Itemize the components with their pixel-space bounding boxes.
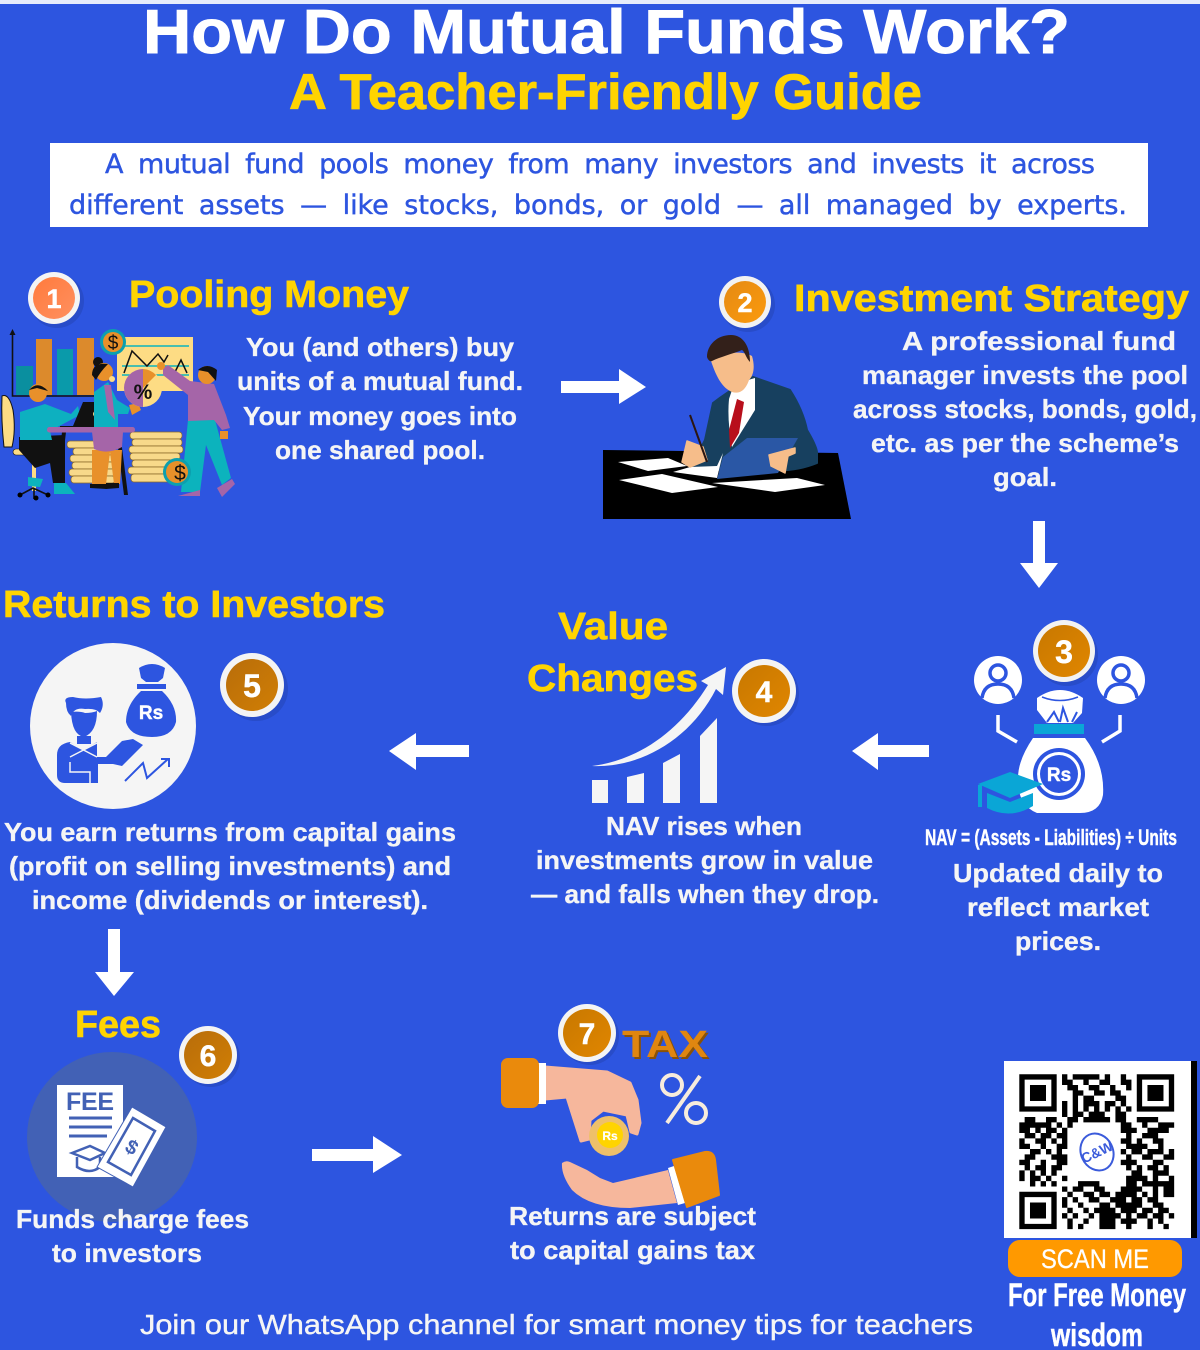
jacket — [690, 377, 817, 470]
arrow: step 3 to step 4 — [852, 733, 929, 770]
step 6 text: Funds charge fees — [16, 1204, 249, 1234]
step 1 heading: Pooling Money — [129, 274, 409, 316]
coin stacks — [67, 432, 183, 483]
step 7 badge: 7 — [579, 1018, 595, 1051]
step 6 text — [16, 1204, 249, 1268]
step 6 badge: 6 — [200, 1040, 216, 1073]
step 4 text: — and falls when they drop. — [531, 879, 879, 909]
step 4 badge — [732, 659, 799, 726]
writing hand — [682, 441, 707, 467]
investor left — [974, 656, 1022, 704]
bar chart in illustration — [10, 329, 100, 396]
step 7 text — [509, 1201, 756, 1265]
desk and laptop — [47, 402, 135, 495]
step 4 badge: 4 — [756, 676, 773, 709]
step 5 heading: Returns to Investors — [3, 584, 385, 626]
illustration: fund manager at desk — [603, 335, 851, 519]
pen — [690, 415, 707, 462]
step 3 text — [953, 858, 1163, 956]
open page — [673, 453, 723, 478]
QR logo: C&W — [1078, 1137, 1116, 1166]
arrow: step 5 to step 6 — [95, 929, 134, 996]
arrow: step 4 to step 5 — [389, 733, 469, 770]
step 5 text: You earn returns from capital gains — [4, 817, 456, 847]
coin bottom — [163, 458, 191, 486]
rupee coin: Rs — [602, 1129, 618, 1143]
step 2 badge — [719, 276, 775, 332]
money bag: Rs — [139, 703, 163, 724]
fee document: FEE — [66, 1088, 114, 1116]
bottom hand — [562, 1152, 719, 1208]
definition box: different assets — like stocks, bonds, or gold — all managed by experts. — [69, 190, 1127, 221]
step 3 badge — [1033, 620, 1098, 686]
step 1 text: one shared pool. — [275, 435, 485, 465]
definition box: A mutual fund pools money from many investors and invests it across — [105, 149, 1095, 180]
banknote: $ — [121, 1136, 142, 1160]
arrow: step 1 to step 2 — [561, 369, 646, 404]
fee icon — [27, 1052, 197, 1222]
standing woman — [90, 357, 141, 489]
line chart board — [117, 337, 193, 391]
footer call to action: Join our WhatsApp channel for smart money tips for teachers — [140, 1309, 973, 1340]
investor right — [1097, 656, 1145, 704]
step 2 heading: Investment Strategy — [794, 278, 1189, 320]
step 7 text: to capital gains tax — [510, 1235, 756, 1265]
step 7 badge — [558, 1004, 619, 1065]
investor figure — [57, 697, 143, 783]
tie — [729, 399, 744, 448]
step 2 text: across stocks, bonds, gold, — [853, 394, 1197, 424]
papers — [618, 458, 825, 493]
coin top — [100, 329, 126, 355]
step 5 badge — [220, 653, 288, 721]
illustration: investor with returns — [30, 643, 196, 809]
graduation cap — [978, 772, 1043, 814]
folder — [717, 438, 798, 479]
bag neck — [1037, 690, 1083, 723]
banknote — [97, 1107, 166, 1187]
step 5 badge: 5 — [243, 668, 261, 704]
hair — [707, 335, 750, 362]
pie chart with percent: % — [134, 381, 153, 404]
growth arrow — [125, 759, 169, 781]
step 5 text — [4, 817, 456, 915]
arrow: step 2 to step 3 — [1020, 521, 1058, 588]
QR caption — [1008, 1277, 1186, 1350]
title: How Do Mutual Funds Work? — [143, 0, 1070, 67]
definition box — [50, 143, 1148, 227]
coin top: $ — [108, 333, 119, 354]
shirt — [728, 378, 755, 447]
step 2 text: goal. — [993, 462, 1057, 492]
money bag — [126, 664, 176, 737]
step 2 text: etc. as per the scheme’s — [871, 428, 1179, 458]
QR code — [1004, 1061, 1197, 1238]
arrow: step 6 to step 7 — [312, 1136, 402, 1173]
connectors — [998, 715, 1120, 742]
bag band — [1034, 724, 1084, 734]
QR data modules — [1019, 1077, 1174, 1226]
step 4 text: NAV rises when — [606, 811, 802, 841]
step 1 badge — [28, 272, 84, 328]
seated man — [19, 384, 80, 494]
illustration: pooled money bag and investors — [974, 656, 1145, 814]
illustration: people pooling money — [2, 329, 235, 500]
step 1 text: You (and others) buy — [246, 332, 515, 362]
QR logo — [1074, 1127, 1121, 1176]
step 2 text — [853, 326, 1197, 492]
chair — [2, 396, 50, 500]
step 4 heading: Changes — [527, 658, 698, 700]
scan me button — [1008, 1240, 1182, 1277]
step 4 heading — [527, 606, 698, 700]
QR finder patterns — [1019, 1074, 1174, 1229]
illustration: tax hands and coin — [501, 1058, 719, 1208]
step 4 text — [531, 811, 879, 909]
top hand — [501, 1058, 640, 1141]
step 5 text: (profit on selling investments) and — [9, 851, 451, 881]
desk — [603, 450, 851, 519]
subtitle: A Teacher-Friendly Guide — [289, 64, 922, 120]
percent sign — [662, 1075, 706, 1123]
step 4 text: investments grow in value — [536, 845, 873, 875]
step 7 text: Returns are subject — [509, 1201, 756, 1231]
neck and face — [711, 353, 754, 393]
step 3 badge: 3 — [1055, 634, 1073, 670]
step 1 badge: 1 — [46, 284, 62, 314]
TAX label: TAX — [622, 1024, 709, 1066]
step 3 text: reflect market — [967, 892, 1149, 922]
step 6 text: to investors — [52, 1238, 202, 1268]
step 2 badge: 2 — [737, 288, 753, 318]
rupee coin — [1033, 748, 1085, 800]
rising chart icon — [592, 667, 726, 803]
step 6 badge — [179, 1026, 240, 1087]
pie chart with percent — [124, 369, 162, 407]
fee document — [57, 1085, 123, 1177]
coin bottom: $ — [174, 462, 186, 485]
rupee coin — [589, 1116, 629, 1156]
step 2 text: A professional fund — [902, 326, 1176, 356]
other hand — [769, 448, 795, 473]
step 5 text: income (dividends or interest). — [32, 885, 428, 915]
standing man — [157, 362, 235, 497]
step 1 text — [237, 332, 523, 465]
bag body — [1018, 738, 1103, 813]
step 3 text: prices. — [1015, 926, 1101, 956]
step 1 text: Your money goes into — [243, 401, 517, 431]
step 2 text: manager invests the pool — [862, 360, 1188, 390]
scan me button: SCAN ME — [1041, 1244, 1149, 1274]
TAX label: TAX — [624, 1026, 711, 1068]
rupee coin: Rs — [1047, 765, 1071, 786]
step 3 text: Updated daily to — [953, 858, 1163, 888]
step 6 heading: Fees — [75, 1004, 161, 1046]
step 1 text: units of a mutual fund. — [237, 366, 523, 396]
step 4 heading: Value — [558, 606, 668, 648]
